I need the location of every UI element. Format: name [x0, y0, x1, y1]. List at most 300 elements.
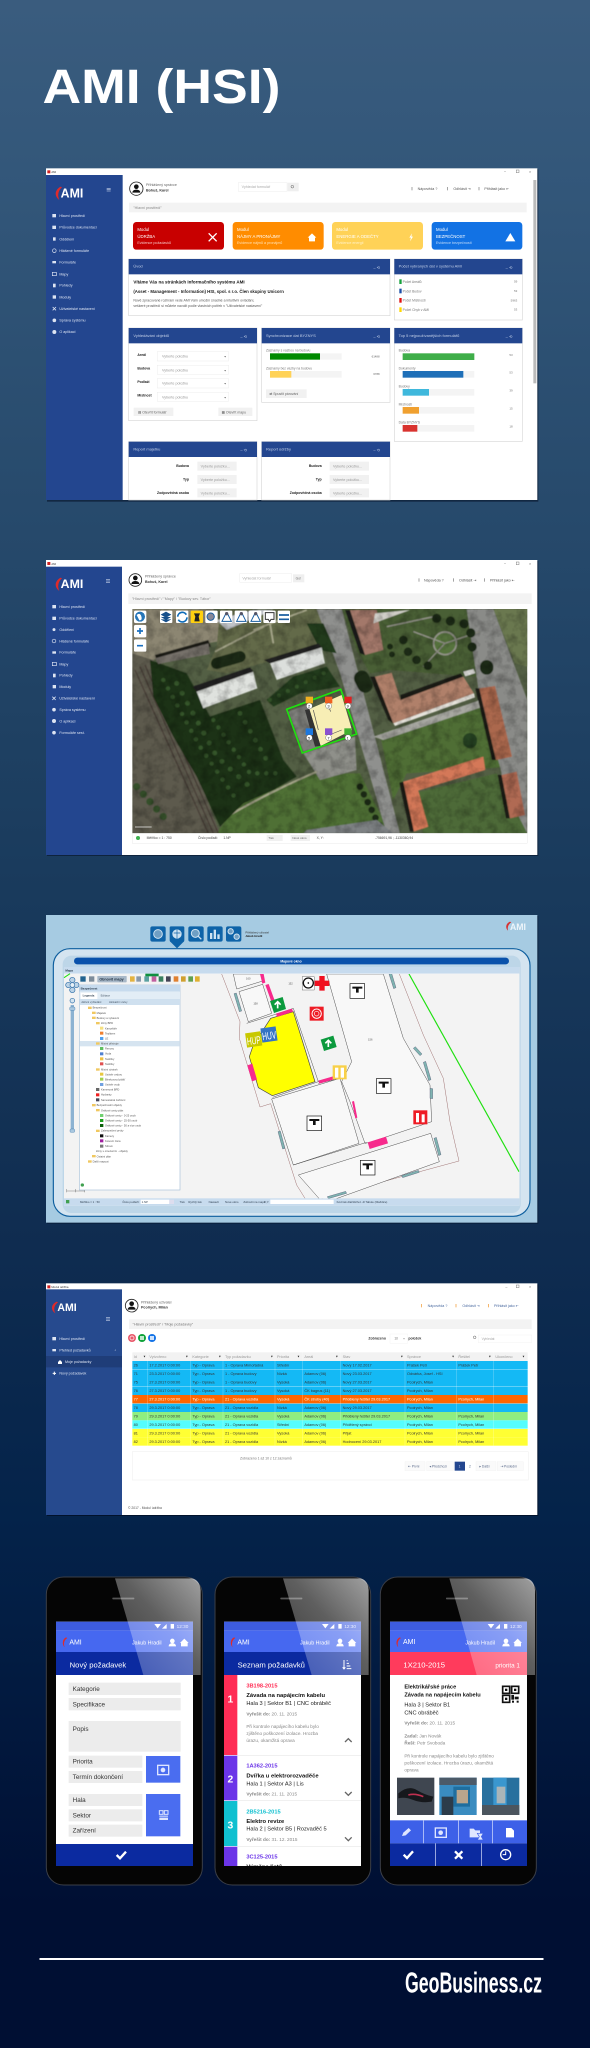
- panel: úvod: – ⟲: [373, 265, 381, 270]
- panel: report majetku: – ⟲: [240, 448, 248, 453]
- panel: top 5: Místnosti: [399, 402, 412, 406]
- table: ▼: [452, 1355, 455, 1359]
- table: 1 - Oprava budovy: [225, 1381, 257, 1385]
- header: "Hlavní prostředí": [133, 206, 162, 210]
- action buttons: Vyhledat: [482, 1337, 495, 1341]
- table: 76: [134, 1389, 138, 1393]
- table: Pcolrych, Milan: [407, 1415, 433, 1419]
- header: Nápověda ?: [428, 1304, 447, 1308]
- card: údržba: Evidence požadavků: [137, 241, 171, 245]
- card: bezpečnost: Evidence bezpečnosti: [436, 241, 472, 245]
- header: [125, 1299, 532, 1329]
- table: 1 - Oprava budovy: [225, 1389, 257, 1393]
- panel: report údržby: Typ: [316, 478, 322, 482]
- map status bar: Měřítko = 1 : 750: [147, 836, 172, 840]
- table: Nízká: [277, 1372, 288, 1376]
- legend panel: Hydranty: [101, 1093, 112, 1097]
- panel: vyhledávání objektů: – ⟲: [240, 334, 248, 339]
- panel: report údržby: Vyberte položku...: [333, 478, 362, 482]
- table: Typ - Oprava: [192, 1381, 215, 1385]
- card: bezpečnost: [432, 222, 522, 250]
- window frame: Mapové okno: [280, 959, 302, 963]
- card: energie: Modul: [336, 227, 348, 232]
- legend panel: Místní výstrah: [101, 1067, 118, 1071]
- icon: HUV: HUV: [261, 1029, 278, 1043]
- legend panel: Uzávěr vzdoru: [105, 1072, 123, 1076]
- panel: úvod: [129, 259, 390, 316]
- panel: top 5: 15: [509, 407, 513, 411]
- table: Adamov (06): [304, 1440, 327, 1444]
- card: energie: Evidence energií: [336, 241, 364, 245]
- legend panel: Uzávěr vody: [105, 1083, 120, 1087]
- panel: dashboard screenshot: –: [504, 170, 507, 174]
- table: 17.2.2017 0:00:00: [149, 1364, 180, 1368]
- panel: počet dat: – ⟲: [506, 265, 513, 270]
- table: 27.3.2017 0:00:00: [149, 1398, 180, 1402]
- panel: report údržby: Report údržby: [266, 447, 291, 452]
- panel: report majetku: Typ: [183, 478, 189, 482]
- menu: Mapy: [59, 272, 68, 276]
- legend panel: [79, 985, 180, 1190]
- header: [128, 574, 532, 604]
- phone: request detail: [380, 1577, 536, 1885]
- table: Přidělený správci: [343, 1423, 372, 1427]
- table: Pcolrych, Milan: [407, 1432, 433, 1436]
- panel: synchronizace dat: Záznamy bez vazby na budovu: [266, 367, 312, 371]
- highlighted building: 3: [327, 704, 330, 709]
- legend panel: Tepláren: [105, 1031, 116, 1035]
- table: Pcolrych, Milan: [458, 1432, 484, 1436]
- terrain: [132, 609, 527, 833]
- panel: počet dat: 53: [514, 289, 518, 293]
- table: Řešitel: [458, 1354, 470, 1359]
- detail text: Při kontrole napájecího kabelu bylo zjištěno: [404, 1753, 494, 1758]
- panel: report majetku: Vyberte položku...: [201, 478, 230, 482]
- logo: AMI: [61, 186, 83, 200]
- form: Sektor: [73, 1812, 91, 1819]
- status bar: 1.NP: [142, 1200, 148, 1204]
- texture: [132, 609, 527, 833]
- detail text: Elektrikářské práce: [404, 1685, 456, 1691]
- card: údržba: ÚDRŽBA: [137, 234, 155, 239]
- table: ▼: [143, 1355, 146, 1359]
- status bar: Rychlý tisk: [188, 1200, 202, 1204]
- header: [129, 182, 527, 212]
- status bar: X,Y:: [264, 1200, 269, 1204]
- logo: [231, 1637, 250, 1647]
- photos: [397, 1778, 519, 1815]
- form: Termín dokončení: [73, 1774, 123, 1781]
- status bar: Zobrazit na mapě: [243, 1200, 266, 1204]
- legend panel: Kamery: [105, 1134, 115, 1138]
- map status bar: -756691,96 ; -1130360,94: [375, 836, 413, 840]
- status bar: Tisk: [180, 1200, 185, 1204]
- table: Adamov (06): [304, 1381, 327, 1385]
- legend panel: Renovy: [105, 1047, 115, 1051]
- panel: table screenshot: [46, 1283, 538, 1516]
- map toolbar: Obnovit mapy: [99, 978, 125, 982]
- card: energie: [332, 222, 423, 250]
- legend panel: Aktivační vrstvy: [109, 1000, 128, 1004]
- phone: new request: [46, 1577, 202, 1885]
- panel: top 5: Data BYZNYS: [399, 420, 421, 424]
- panel: počet dat: Počet Budov: [403, 289, 422, 293]
- title: AMI (HSI): [42, 61, 280, 114]
- table: Typ - Oprava: [192, 1423, 215, 1427]
- pagination: ⇥ Poslední: [500, 1464, 517, 1468]
- table: 71: [134, 1372, 138, 1376]
- item 1: 3B198-2015: [246, 1683, 277, 1689]
- panel: top 5: 53: [509, 353, 513, 357]
- panel: vyhledávání objektů: Podlaží: [137, 380, 151, 384]
- panel: synchronizace dat: [262, 328, 390, 402]
- panel: top 5: [394, 328, 522, 441]
- sidebar: [46, 175, 123, 500]
- logo: AMI: [403, 1639, 415, 1646]
- action buttons: ▾: [403, 1337, 405, 1340]
- legend panel: Zóny BPD: [101, 1021, 113, 1025]
- legend panel: Místní přístroje: [101, 1041, 119, 1045]
- detail text: Hala 3 | Sektor B1: [404, 1703, 450, 1709]
- header: Pcolrych, Milan: [141, 1306, 168, 1310]
- legend panel: Bezpečnost: [93, 1006, 107, 1010]
- panel: top 5: Top 5 nejpoužívanějších formulářů: [399, 333, 459, 338]
- highlighted building: 9: [347, 704, 350, 709]
- table: Vysoká: [277, 1389, 290, 1393]
- map status bar: 1.NP: [223, 836, 232, 840]
- legend panel: Světlíky: [105, 1062, 115, 1066]
- panel: dashboard screenshot: [46, 168, 538, 502]
- panel: report majetku: Zodpovědná osoba: [157, 491, 189, 495]
- table: ▼: [522, 1355, 525, 1359]
- table: ČK bagrus (11): [304, 1388, 331, 1393]
- item 1: [224, 1675, 361, 1756]
- table: Nový 17.02.2017: [343, 1364, 372, 1368]
- table: 78: [134, 1406, 138, 1410]
- panel: vyhledávání objektů: [129, 328, 257, 421]
- status bar: Nastavit: [209, 1200, 219, 1204]
- header: Bohuš, Karel: [145, 580, 168, 584]
- menu: O aplikaci: [59, 330, 76, 334]
- item 2: Dvířka u elektrorozvaděče: [246, 1773, 319, 1779]
- phone: request list: [215, 1577, 371, 1885]
- phone: request detail: 12:30: [510, 1624, 522, 1629]
- legend panel: Bleskosvod plášť: [105, 1077, 126, 1081]
- highlighted building: 5: [308, 735, 311, 740]
- menu: [52, 214, 97, 334]
- item 1: Hala 3 | Sektor B1 | CNC obráběč: [246, 1701, 331, 1707]
- form: Priorita: [73, 1759, 93, 1766]
- status bar: [66, 1199, 387, 1204]
- card: nájmy: NÁJMY A PRONÁJMY: [237, 234, 281, 239]
- table: 27.3.2017 0:00:00: [149, 1389, 180, 1393]
- panel: top 5: 18: [509, 425, 513, 429]
- menu: Hlášené formuláře: [59, 639, 89, 643]
- pagination: 2: [469, 1464, 471, 1468]
- table: 1 - Oprava Mimořádná: [225, 1364, 264, 1368]
- action buttons: Zobrazeno: [368, 1337, 386, 1341]
- detail text: CNC obráběč: [404, 1710, 439, 1716]
- table: Vysoká: [277, 1398, 290, 1402]
- panel: vyhledávání objektů: ▦ Otevřít mapu: [222, 410, 246, 414]
- table: Typ - Oprava: [192, 1372, 215, 1376]
- form: Hala: [73, 1797, 86, 1804]
- table: Správce: [407, 1355, 421, 1359]
- phone: new request: 12:30: [177, 1624, 189, 1629]
- map status bar: X, Y:: [317, 836, 324, 840]
- panel: floor plan screenshot: [46, 915, 538, 1224]
- panel: synchronizace dat: 6788: [373, 372, 380, 376]
- panel: úvod: (Asset - Management - Information) HSI, spol. s r.o. Člen skupiny Unicorn: [133, 289, 284, 294]
- phone: new request: Jakub Hradil: [132, 1640, 162, 1646]
- action buttons: 10: [394, 1337, 398, 1341]
- table: Střední: [277, 1423, 290, 1427]
- panel: mobile phones: [46, 1577, 536, 1885]
- table: Adamov (06): [304, 1372, 327, 1376]
- table: Pcolrych, Milan: [407, 1440, 433, 1444]
- item 4: Výměna listů: [246, 1863, 283, 1870]
- table: Nový 27.03.2017: [343, 1381, 372, 1385]
- header: Přihlášený správce: [145, 574, 176, 578]
- item 3: Vyřešit do: 31. 12. 2015: [246, 1837, 298, 1842]
- panel: vyhledávání objektů: Budova: [137, 366, 150, 370]
- map toolbar: [64, 974, 200, 982]
- table: Vytvořeno: [149, 1355, 166, 1359]
- menu: Uživatelské nastavení: [59, 307, 95, 311]
- table: Přidělený řešitel 29.03.2017: [343, 1415, 390, 1419]
- status bar: Číslo podlaží:: [122, 1199, 140, 1204]
- table: Vysoká: [277, 1432, 290, 1436]
- table: Id: [134, 1355, 137, 1359]
- header: Bohuš, Karel: [146, 189, 169, 193]
- table: 29.3.2017 0:00:00: [149, 1415, 180, 1419]
- table: Prášek Petr: [407, 1364, 428, 1368]
- phone: request list: 12:30: [344, 1624, 356, 1629]
- menu: Formuláře: [59, 261, 76, 265]
- table: Nízká: [277, 1440, 288, 1444]
- panel: vyhledávání objektů: ▤ Otevřít formulář: [138, 410, 167, 414]
- panel: vyhledávání objektů: ▾: [224, 382, 226, 386]
- panel: report majetku: Report majetku: [133, 447, 160, 452]
- panel: table screenshot: –: [505, 1285, 508, 1289]
- table: Adamov (06): [304, 1432, 327, 1436]
- panel: report údržby: Zodpovědná osoba: [290, 491, 322, 495]
- action bars: [390, 1820, 527, 1866]
- table: Pcolrych, Milan: [458, 1398, 484, 1402]
- table: Typ - Oprava: [192, 1389, 215, 1393]
- card: nájmy: Evidence nájmů a pronájmů: [237, 241, 282, 245]
- menu: Hlášené formuláře: [59, 249, 89, 253]
- legend panel: Aktivní vyhledání: [81, 1000, 102, 1004]
- table: Pcolrych, Milan: [407, 1423, 433, 1427]
- pagination: ◂ Předchozí: [429, 1464, 447, 1468]
- detail text: Závada na napájecím kabelu: [404, 1693, 481, 1699]
- legend panel: Legenda: [83, 994, 95, 998]
- table: Pcolrych, Milan: [407, 1406, 433, 1410]
- legend panel: Kotevní zóna: [105, 1139, 121, 1143]
- detail text: Zadal: Jan Novák: [404, 1734, 442, 1739]
- panel: vyhledávání objektů: Místnost: [137, 393, 152, 397]
- legend panel: Ostatní plán: [97, 1154, 112, 1158]
- panel: vyhledávání objektů: Vyberte položku: [162, 395, 188, 399]
- item 4: 3C125-2015: [246, 1855, 277, 1861]
- menu: Moduly: [59, 295, 71, 299]
- highlighted building: 1: [347, 735, 350, 740]
- menu: Oddělení: [59, 628, 74, 632]
- legend panel: Světlíky: [105, 1057, 115, 1061]
- panel: top 5: 39: [509, 389, 513, 393]
- table: Pcolrych, Milan: [458, 1440, 484, 1444]
- icon: red cross: [315, 976, 329, 991]
- detail text: Vyřešit do: 20. 11. 2015: [404, 1721, 455, 1726]
- panel: top 5: Dokumenty: [399, 367, 416, 371]
- detail text: poškození izolace. Hrozba úrazu, okamžitá: [404, 1760, 494, 1765]
- table: Typ požadavku: [225, 1355, 251, 1359]
- pagination: ⇤ První: [408, 1464, 420, 1468]
- action buttons: [128, 1334, 532, 1343]
- panel: report majetku: Vyberte položku...: [201, 464, 230, 468]
- table: 23.3.2017 0:00:00: [149, 1372, 180, 1376]
- navigation icons: Přihlášený uživatel: [245, 931, 269, 935]
- panel: počet dat: 53: [514, 308, 518, 312]
- panel: počet dat: Počet Místností: [403, 299, 426, 303]
- header: Vyhledat formulář: [242, 185, 271, 189]
- header: Odhlásit ⇥: [459, 578, 477, 582]
- panel: top 5: – ⟲: [506, 334, 513, 339]
- pagination: 1: [459, 1464, 461, 1468]
- card: nájmy: [233, 222, 324, 250]
- menu: Uživatelské nastavení: [59, 697, 95, 701]
- pagination: ▸ Další: [479, 1464, 490, 1468]
- panel: vyhledávání objektů: Vyberte položku: [162, 355, 188, 359]
- menu: Formuláře sest.: [59, 731, 85, 735]
- item 1: Vyřešit do: 20. 11. 2015: [246, 1711, 297, 1716]
- panel: počet dat: 59: [514, 280, 518, 284]
- legend panel: Budovy a vybavení: [97, 1016, 119, 1020]
- menu: ‹: [115, 1349, 117, 1353]
- table: Nový 29.03.2017: [343, 1406, 372, 1410]
- map status bar: Tisk: [268, 836, 274, 840]
- header: Přihlášený správce: [146, 183, 177, 187]
- header: Přihlásit jako ⇤: [490, 578, 516, 582]
- panel: synchronizace dat: ⇄ Spustit párování: [269, 392, 298, 396]
- item 1: úrazu, okamžitá oprava: [246, 1738, 295, 1743]
- logo: AMI: [510, 922, 526, 932]
- legend panel: Editace: [101, 994, 111, 998]
- menu: [46, 1337, 122, 1376]
- table: Pcolrych, Milan: [407, 1381, 433, 1385]
- legend panel: Únikové cesty - 25-50 osob: [105, 1118, 138, 1123]
- legend panel: Bezpečnost: [81, 986, 97, 990]
- phone: request detail: priorita 1: [495, 1662, 520, 1669]
- panel: report majetku: Vyberte položku...: [201, 491, 230, 495]
- table: Odvárka, Josef - HSI: [407, 1372, 443, 1376]
- table: Nový 23.03.2017: [343, 1372, 372, 1376]
- table: Adamov (06): [304, 1423, 327, 1427]
- table: 21 - Oprava vozidla: [225, 1423, 259, 1427]
- item 1: 1: [227, 1695, 233, 1706]
- panel: úvod: veškeré prostředí si můžete navolit podle vlastních potřeb v "Uživatelské nastavení": [133, 304, 263, 308]
- trees: [137, 618, 487, 827]
- status bar: Kód tisk dlaždic/řez. dl Tabule (Dlaždice): [337, 1200, 387, 1204]
- logo: AMI: [69, 1639, 82, 1646]
- table: 21 - Oprava vozidla: [225, 1432, 259, 1436]
- menu: Přehled požadavků: [59, 1349, 91, 1353]
- item 2: 1A362-2015: [246, 1764, 277, 1770]
- item 1: Závada na napájecím kabelu: [246, 1693, 325, 1699]
- menu: Moje požadavky: [65, 1360, 92, 1364]
- panel: table screenshot: ×: [529, 1285, 531, 1289]
- item 1: zjištěno poškození izolace. Hrozba: [246, 1731, 318, 1736]
- menu: Průvodce dokumentací: [59, 226, 97, 230]
- menu: Nový požadavek: [59, 1372, 87, 1376]
- icon: HUP: [245, 1031, 262, 1048]
- legend panel: Zóny s omezením - objekty: [96, 1149, 129, 1153]
- table: 75: [134, 1381, 138, 1385]
- panel: počet dat: Počet vybraných dat v systému AMI: [399, 264, 462, 269]
- detail text: Řeší: Petr Svoboda: [404, 1738, 446, 1745]
- panel: report údržby: Vyberte položku...: [333, 491, 362, 495]
- table: Pcolrych, Milan: [407, 1389, 433, 1393]
- card: energie: ENERGIE A ODEČTY: [336, 234, 379, 239]
- phone: request list: Seznam požadavků: [238, 1660, 305, 1669]
- header: Odhlásit ⇥: [462, 1304, 481, 1308]
- table: 80: [134, 1423, 138, 1427]
- form: Specifikace: [73, 1701, 106, 1708]
- panel: vyhledávání objektů: Vyhledávání objektů: [133, 333, 169, 338]
- status bar: Měřítko = 1 : 50: [80, 1200, 100, 1204]
- logo: AMI: [57, 1302, 77, 1314]
- navigation icons: Jakub Hradil: [245, 934, 263, 938]
- icon: yellow square: [333, 1065, 347, 1079]
- table: Střední: [277, 1364, 290, 1368]
- panel: report údržby: – ⟲: [373, 448, 381, 453]
- legend panel: Voda: [105, 1052, 112, 1056]
- legend panel: Majetek: [97, 1011, 107, 1015]
- item 2: 2: [227, 1775, 233, 1786]
- panel: vyhledávání objektů: Vyberte položku: [162, 382, 188, 386]
- table: Pcolrych, Milan: [458, 1415, 484, 1419]
- form: Kategorie: [73, 1686, 100, 1693]
- menu: Průvodce dokumentací: [59, 617, 97, 621]
- table: Prášek Petr: [458, 1364, 479, 1368]
- panel: synchronizace dat: – ⟲: [373, 334, 381, 339]
- card: nájmy: Modul: [237, 227, 249, 232]
- item 1: Při kontrole napájecího kabelu bylo: [246, 1724, 319, 1729]
- window frame: [53, 949, 530, 1216]
- legend panel: Únikové cesty plán: [101, 1107, 124, 1112]
- room numbers: 156: [368, 1037, 373, 1041]
- icon: red squares: [310, 1007, 427, 1124]
- panel: report údržby: [262, 442, 390, 500]
- detail text: [404, 1685, 494, 1772]
- header: Nápověda ?: [424, 578, 444, 582]
- card: údržba: [133, 222, 224, 250]
- logo: [396, 1637, 415, 1647]
- header: Vyhledat formulář: [242, 576, 272, 580]
- panel: dashboard screenshot: ×: [529, 170, 531, 174]
- table: 27.3.2017 0:00:00: [149, 1381, 180, 1385]
- item 2: Hala 1 | Sektor A3 | Lis: [246, 1781, 304, 1787]
- phone: request detail: Jakub Hradil: [465, 1640, 495, 1646]
- menu: Pohledy: [59, 674, 73, 678]
- panel: satellite map screenshot: AMI: [51, 562, 56, 566]
- table: Adamov (06): [304, 1415, 327, 1419]
- table: 21 - Oprava vozidla: [225, 1415, 259, 1419]
- table: Pcolrych, Milan: [407, 1398, 433, 1402]
- room numbers: 158: [253, 1001, 258, 1005]
- legend panel: Kanceláře: [105, 1026, 117, 1030]
